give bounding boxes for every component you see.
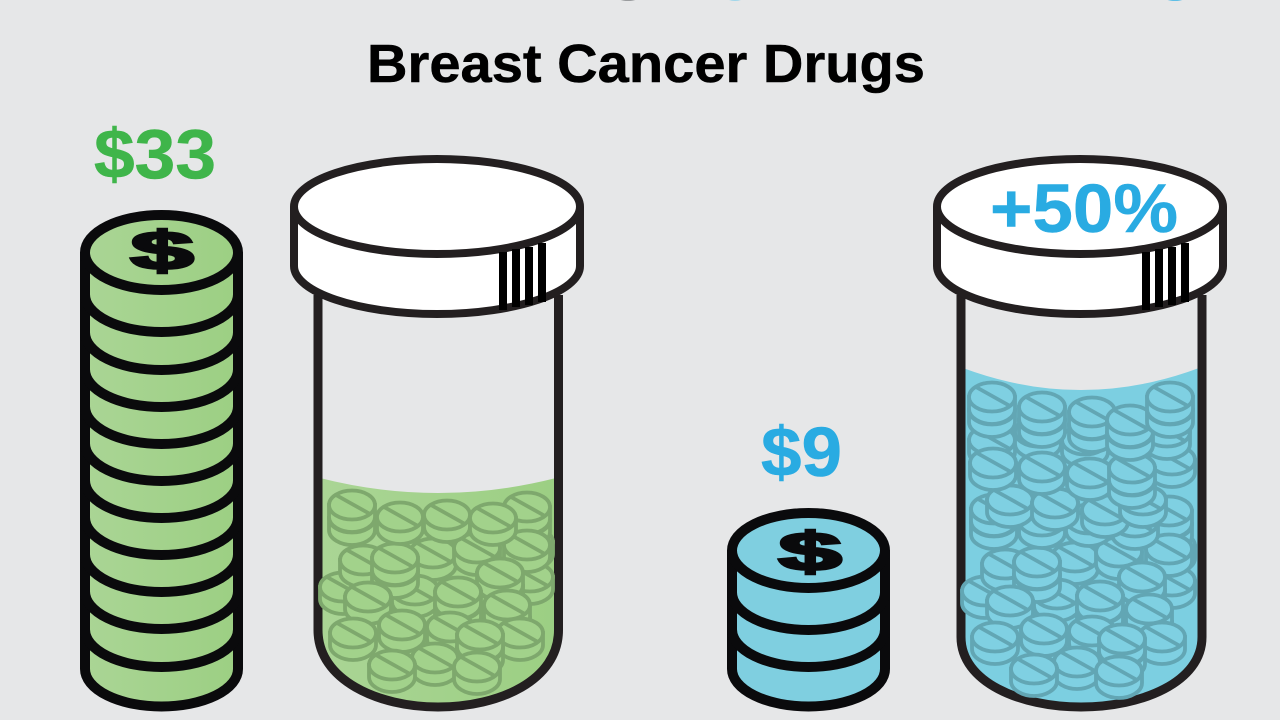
pill bottle: green — [294, 159, 580, 707]
coin stack: blue — [732, 513, 885, 706]
price label: $9: $9 — [761, 413, 842, 491]
pill bottle: blue — [937, 159, 1223, 707]
cap — [937, 159, 1223, 314]
pills: green — [320, 490, 553, 694]
coin stack: green: $ — [130, 220, 194, 281]
price label: $33: $33 — [94, 115, 216, 193]
title: Breast Cancer Drugs — [367, 34, 925, 94]
label: +50%: +50% — [990, 170, 1178, 247]
liquid: green — [320, 478, 556, 707]
cap — [294, 159, 580, 314]
liquid: blue — [963, 368, 1199, 707]
bottle body — [318, 295, 558, 707]
cropped shapes at top edge — [617, 0, 1186, 1]
bottle body — [961, 295, 1202, 707]
pills: blue — [962, 382, 1195, 698]
coin stack: green — [85, 215, 238, 706]
coin stack: blue: $ — [778, 521, 842, 582]
